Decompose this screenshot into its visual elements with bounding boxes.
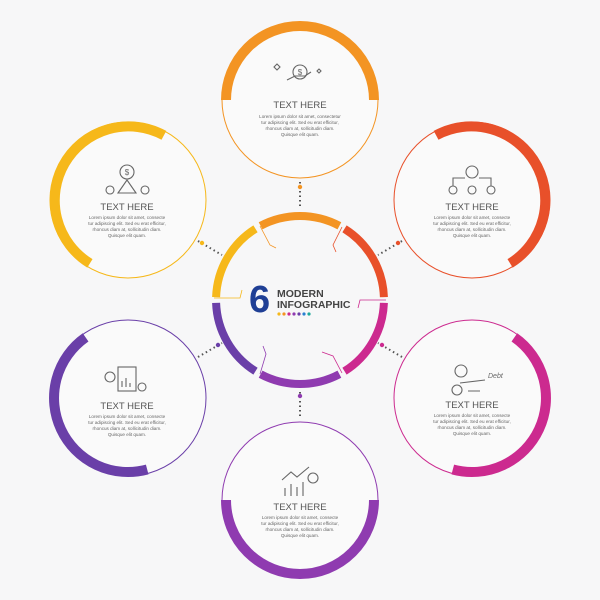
connectors — [198, 182, 402, 418]
center ring — [214, 216, 386, 384]
panel: top — [222, 22, 378, 178]
panel: top: rhoncus diam at, sollicitudin diam. — [266, 126, 334, 131]
center title: INFOGRAPHIC — [277, 299, 351, 311]
panel: top-left: TEXT HERE — [100, 202, 154, 213]
panel: bottom — [222, 422, 378, 578]
panel: bottom-left: TEXT HERE — [100, 401, 154, 412]
panel: bottom-left: rhoncus diam at, sollicitudin diam. — [93, 426, 161, 431]
panel: top-right: TEXT HERE — [445, 202, 499, 213]
panel: bottom-left: Quisque elit quam. — [108, 432, 146, 437]
center title: 6 — [249, 279, 270, 321]
panel: top-right: rhoncus diam at, sollicitudin diam. — [438, 227, 506, 232]
panel: bottom-right: Debt — [488, 373, 504, 380]
center title — [249, 279, 351, 321]
panel: bottom: tur adipiscing elit. Sed eu erat efficitur, — [261, 521, 339, 526]
panel: top-left: tur adipiscing elit. Sed eu erat efficitur, — [88, 221, 166, 226]
panel: bottom-left — [50, 320, 206, 476]
panel: top-right: tur adipiscing elit. Sed eu erat efficitur, — [433, 221, 511, 226]
panel: top-left: $ — [125, 168, 130, 177]
panel: top: Lorem ipsum dolor sit amet, consectetur — [259, 114, 341, 119]
panel: bottom-right: tur adipiscing elit. Sed eu erat efficitur, — [433, 419, 511, 424]
panel: bottom-right: Quisque elit quam. — [453, 431, 491, 436]
panel: top-right: Quisque elit quam. — [453, 233, 491, 238]
panel: top-left — [50, 122, 206, 278]
panel: bottom-right — [394, 320, 550, 476]
panel: top: TEXT HERE — [273, 100, 327, 111]
panel: top-right — [394, 122, 550, 278]
center title: MODERN — [277, 288, 324, 300]
panel: bottom: Quisque elit quam. — [281, 533, 319, 538]
panel: top-left: Quisque elit quam. — [108, 233, 146, 238]
panel: bottom-left: Lorem ipsum dolor sit amet, consecte — [89, 414, 166, 419]
panel: bottom: Lorem ipsum dolor sit amet, consecte — [262, 515, 339, 520]
panel: top: Quisque elit quam. — [281, 132, 319, 137]
panel: bottom-right: rhoncus diam at, sollicitudin diam. — [438, 425, 506, 430]
panel: bottom: rhoncus diam at, sollicitudin diam. — [266, 527, 334, 532]
panel: top-left: rhoncus diam at, sollicitudin diam. — [93, 227, 161, 232]
panel: bottom-left: tur adipiscing elit. Sed eu erat efficitur, — [88, 420, 166, 425]
panel: top-left: Lorem ipsum dolor sit amet, consecte — [89, 215, 166, 220]
panel: top: tur adipiscing elit. Sed eu erat efficitur, — [261, 120, 339, 125]
panel: bottom-right: Lorem ipsum dolor sit amet, consecte — [434, 413, 511, 418]
panel: bottom: TEXT HERE — [273, 502, 327, 513]
panel: top-right: Lorem ipsum dolor sit amet, consecte — [434, 215, 511, 220]
panel: top: $ — [298, 68, 303, 77]
panel: bottom-right: TEXT HERE — [445, 400, 499, 411]
